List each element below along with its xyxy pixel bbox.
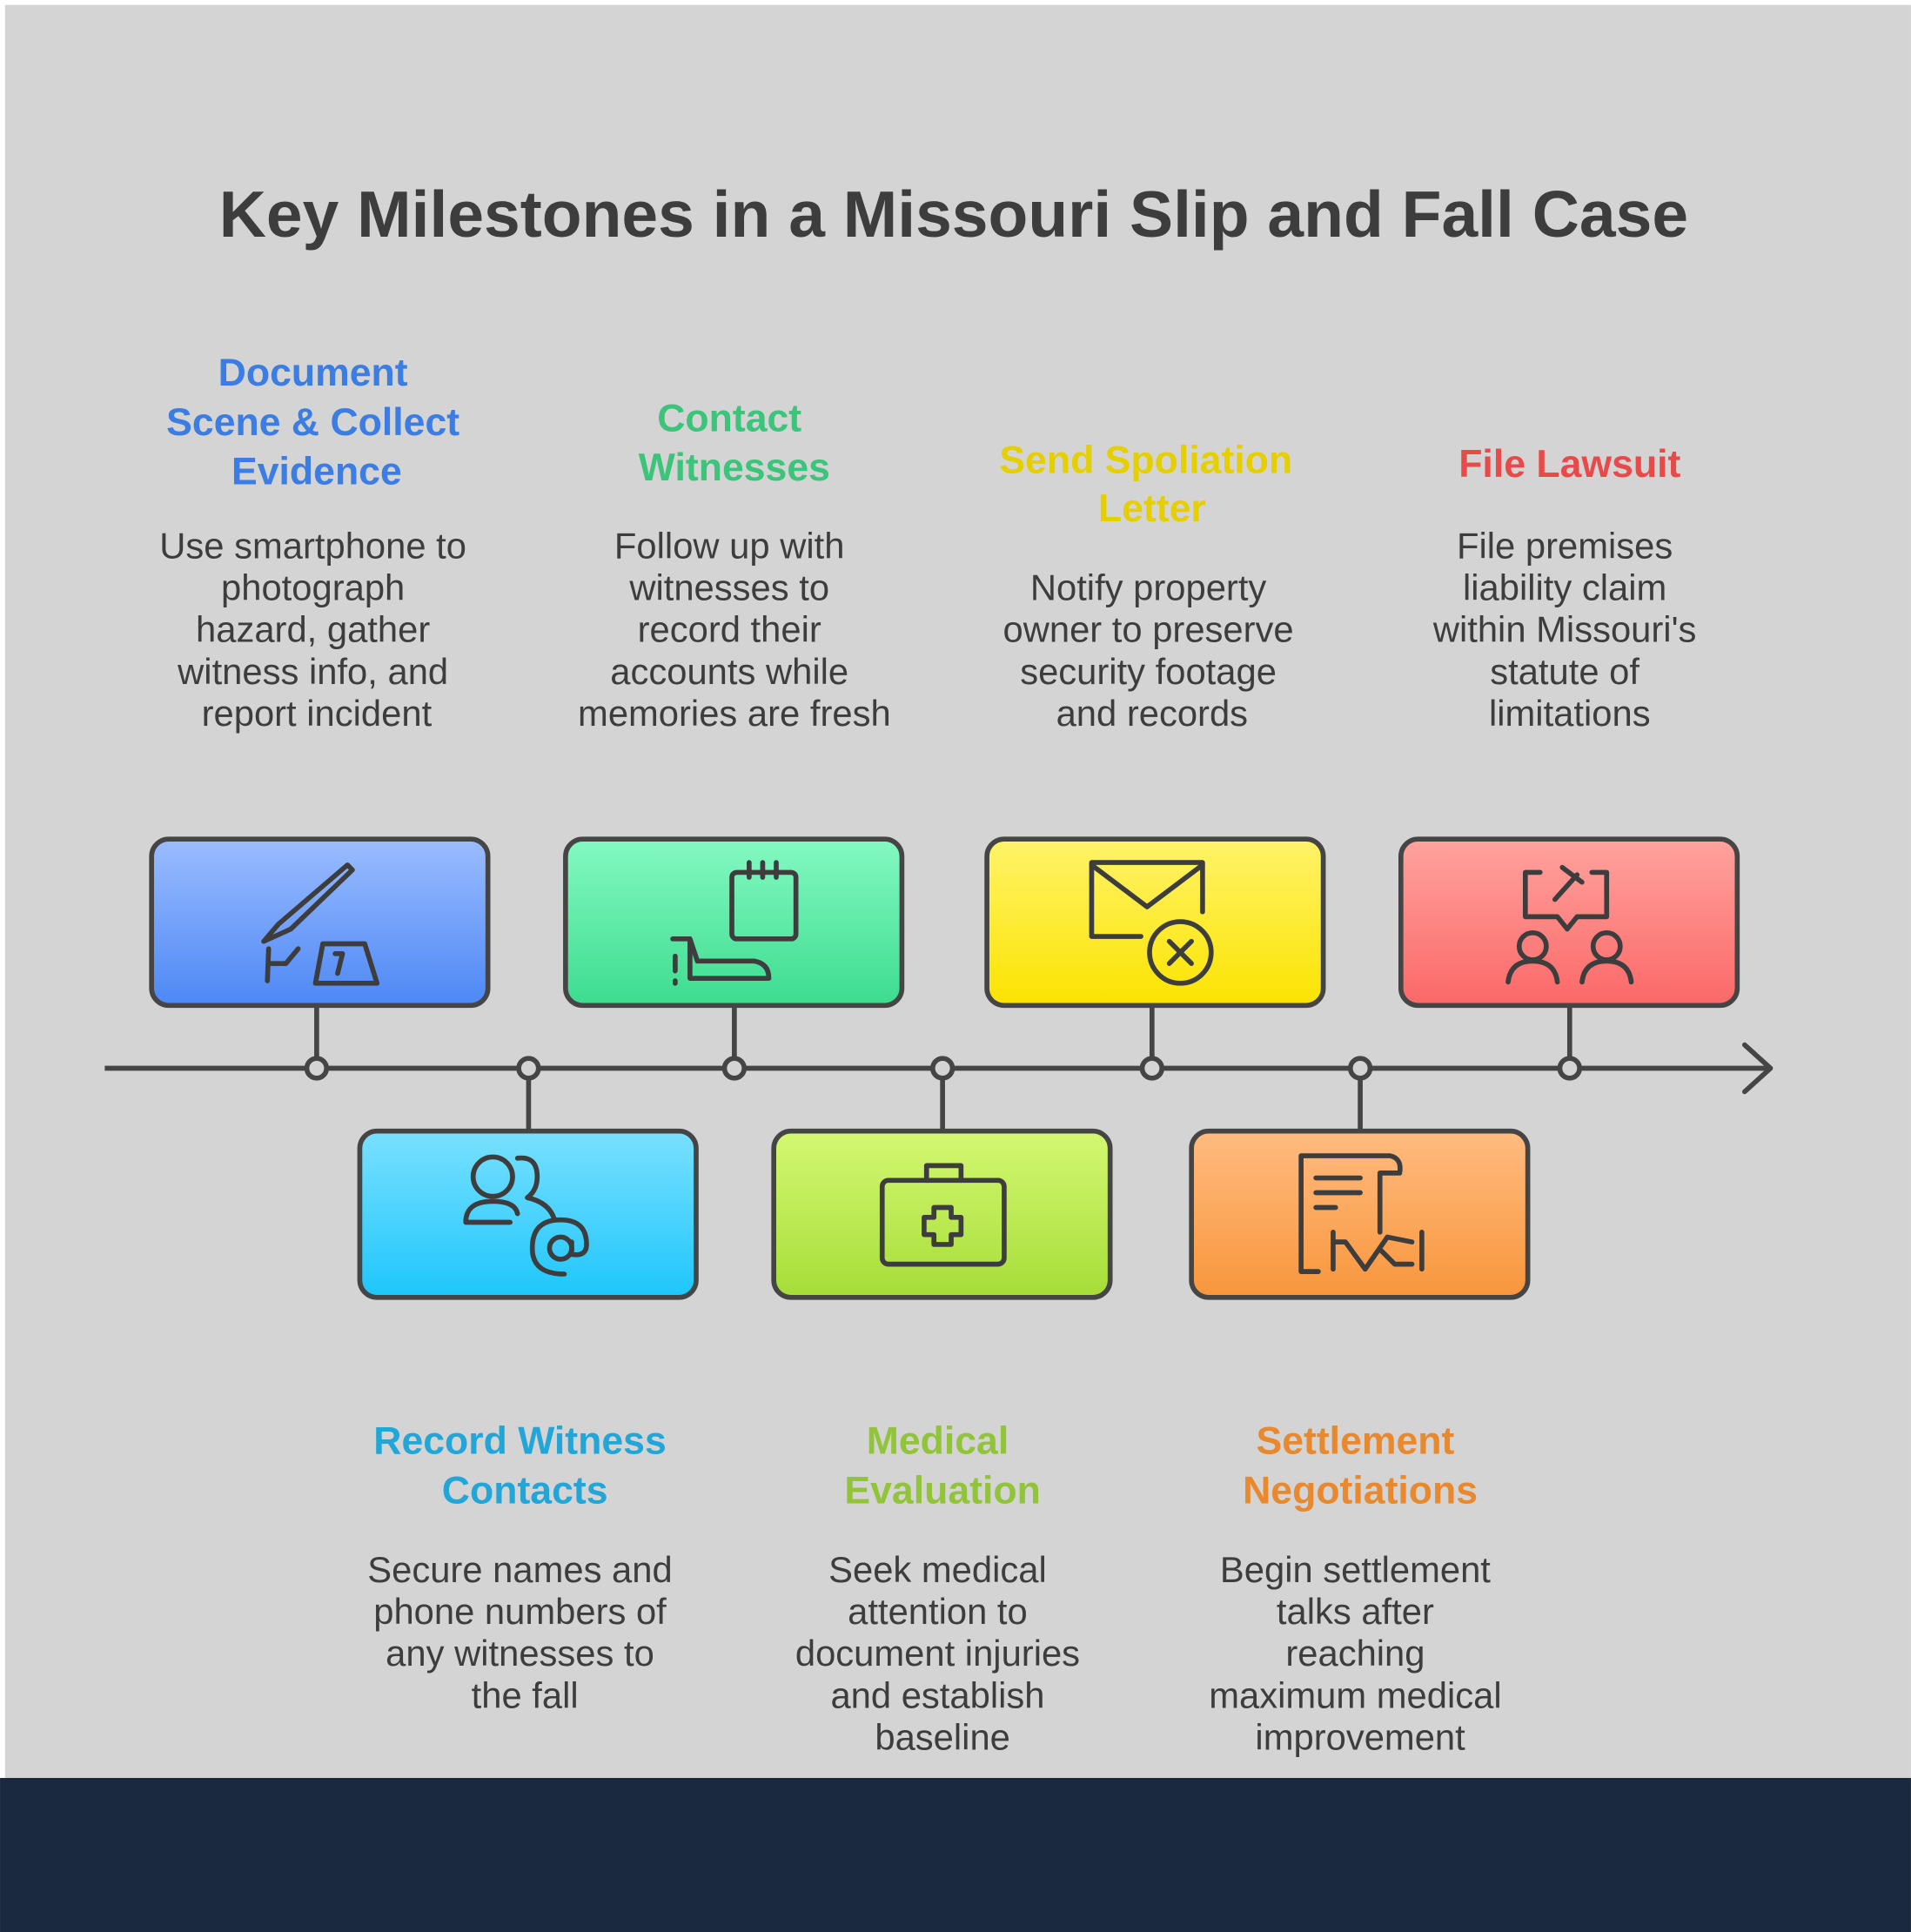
- milestone 4: file lawsuit: [1401, 443, 1737, 1005]
- milestone 5: record witness contacts: [359, 1131, 696, 1715]
- milestone 2: contact witnesses: Contact: [657, 398, 801, 440]
- milestone 2: contact witnesses: Follow up with: [614, 525, 844, 566]
- milestone 7: settlement negotiations: talks after: [1277, 1591, 1434, 1632]
- milestone 5: record witness contacts: Secure names and: [367, 1549, 673, 1590]
- milestone 6: medical evaluation: attention to: [848, 1591, 1028, 1632]
- milestone 3: spoliation letter: Letter: [1098, 487, 1206, 530]
- milestone 6: medical evaluation: and establish: [830, 1674, 1044, 1715]
- milestone 1: document scene: Document: [218, 352, 408, 394]
- milestone 2: contact witnesses: Witnesses: [639, 446, 830, 489]
- milestone 5: record witness contacts: the fall: [472, 1674, 579, 1715]
- milestone 5: record witness contacts: any witnesses to: [386, 1633, 654, 1674]
- milestone 4: file lawsuit: limitations: [1489, 693, 1651, 734]
- milestone 1: document scene: photograph: [221, 567, 405, 608]
- milestone 1: document scene: hazard, gather: [196, 609, 430, 650]
- milestone 7: settlement negotiations: reaching: [1285, 1633, 1425, 1674]
- milestone 1: document scene: Evidence: [231, 450, 402, 493]
- milestone 5: record witness contacts: Contacts: [442, 1469, 608, 1512]
- milestone 2: contact witnesses: [566, 398, 902, 1005]
- footer band: [0, 1778, 1911, 1932]
- milestone 5: record witness contacts: phone numbers of: [373, 1591, 667, 1632]
- milestone 2: contact witnesses: memories are fresh: [578, 693, 891, 734]
- milestone 7: settlement negotiations: Negotiations: [1243, 1469, 1478, 1512]
- milestone 6: medical evaluation: Seek medical: [828, 1549, 1047, 1590]
- milestone 4: file lawsuit: within Missouri's: [1432, 609, 1696, 650]
- milestone 3: spoliation letter: Notify property: [1030, 567, 1266, 608]
- milestone 7: settlement negotiations: improvement: [1255, 1716, 1465, 1757]
- milestone 3: spoliation letter: [987, 439, 1324, 1005]
- milestone 3: spoliation letter: and records: [1056, 693, 1248, 734]
- milestone 7: settlement negotiations: Settlement: [1256, 1420, 1455, 1463]
- milestone 7: settlement negotiations: [1191, 1131, 1528, 1757]
- milestone 1: document scene: Use smartphone to: [159, 525, 466, 566]
- milestone 2: contact witnesses: witnesses to: [628, 567, 829, 608]
- milestone 6: medical evaluation: document injuries: [795, 1633, 1080, 1674]
- milestone 1: document scene: Scene & Collect: [166, 401, 459, 444]
- milestone 2: contact witnesses: record their: [638, 609, 821, 650]
- milestone 1: document scene: witness info, and: [177, 651, 448, 692]
- milestone 6: medical evaluation: [774, 1131, 1110, 1757]
- milestone 1: document scene: report incident: [202, 693, 432, 734]
- milestone 3: spoliation letter: Send Spoliation: [999, 439, 1292, 482]
- milestone 2: contact witnesses: accounts while: [610, 651, 848, 692]
- milestone 6: medical evaluation: Medical: [867, 1420, 1009, 1463]
- milestone 5: record witness contacts: Record Witness: [373, 1420, 667, 1463]
- milestone 3: spoliation letter: security footage: [1020, 651, 1277, 692]
- milestone 4: file lawsuit: File Lawsuit: [1458, 443, 1680, 486]
- timeline: [104, 1007, 1771, 1130]
- milestone 7: settlement negotiations: maximum medical: [1209, 1674, 1502, 1715]
- title: Key Milestones in a Missouri Slip and Fall Case: [219, 178, 1688, 251]
- milestone 6: medical evaluation: baseline: [875, 1716, 1010, 1757]
- milestone 4: file lawsuit: liability claim: [1463, 567, 1666, 608]
- milestone 1: document scene: [151, 352, 488, 1005]
- milestone 4: file lawsuit: File premises: [1457, 525, 1673, 566]
- milestone 6: medical evaluation: Evaluation: [844, 1469, 1041, 1512]
- milestone 4: file lawsuit: statute of: [1490, 651, 1639, 692]
- milestone 7: settlement negotiations: Begin settlement: [1220, 1549, 1491, 1590]
- milestone 3: spoliation letter: owner to preserve: [1002, 609, 1294, 650]
